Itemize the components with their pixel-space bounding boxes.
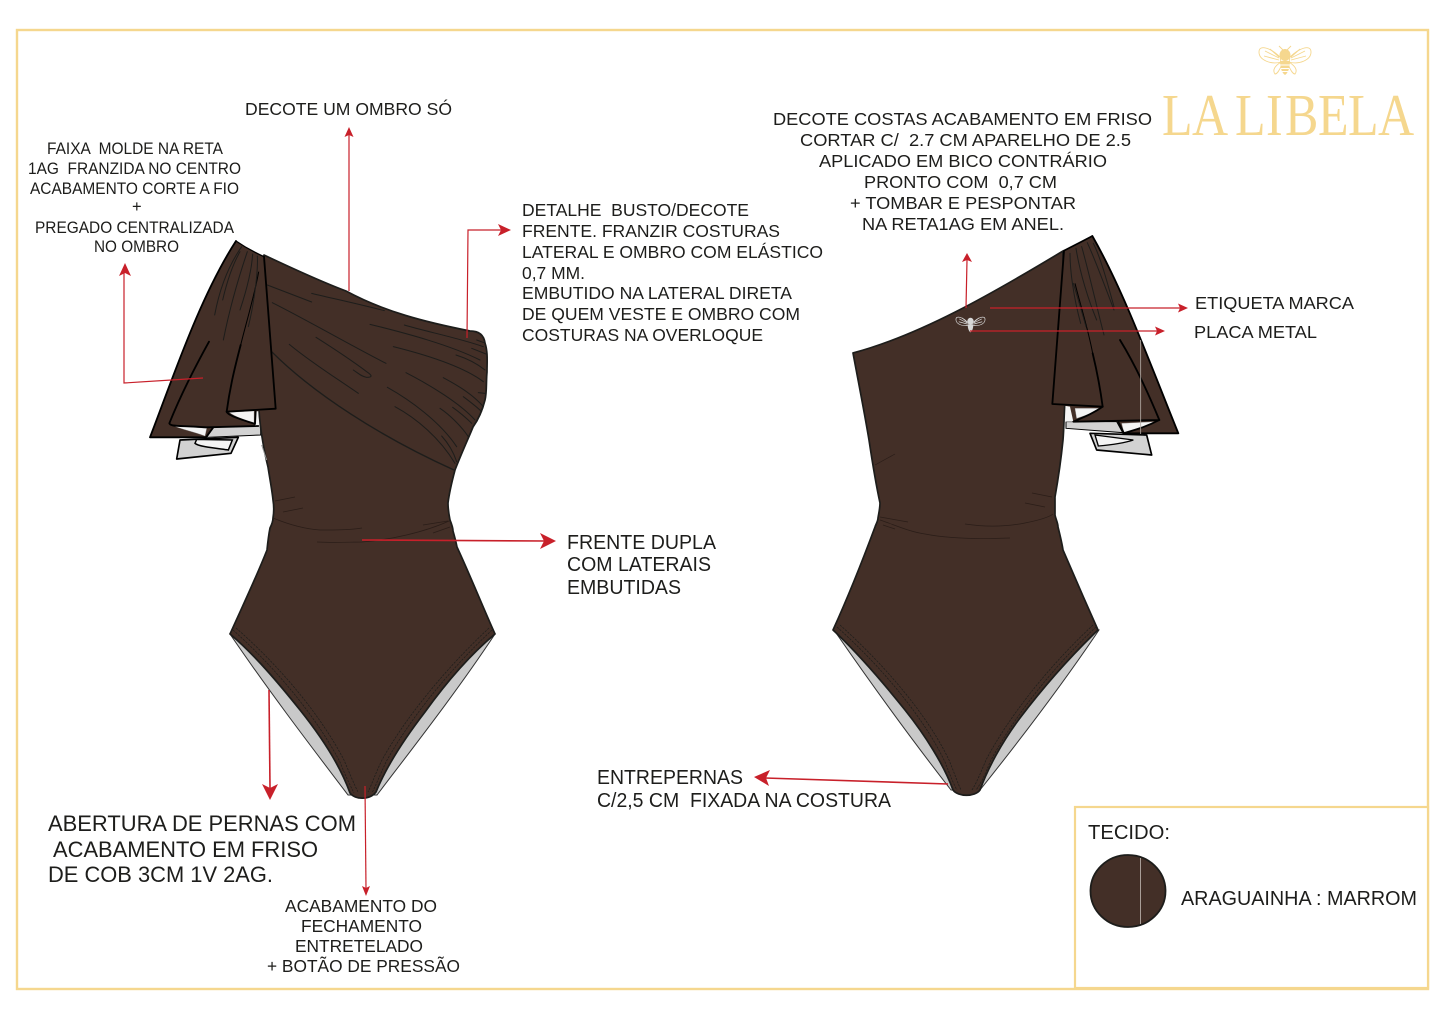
text: detalhe busto/decote: LATERAL E OMBRO COM ELÁSTICO: [522, 242, 823, 262]
text: detalhe busto/decote: DETALHE BUSTO/DECOTE: [522, 200, 749, 220]
heading: tecido: TECIDO:: [1088, 822, 1170, 844]
arrow: abertura de pernas: [262, 690, 278, 800]
text: detalhe busto/decote: EMBUTIDO NA LATERAL DIRETA: [522, 283, 792, 303]
text: decote um ombro: DECOTE UM OMBRO SÓ: [245, 98, 452, 119]
text: acabamento do fechamento: ENTRETELADO: [295, 936, 423, 956]
sleeve gathers: [215, 247, 257, 340]
text: abertura de pernas: [48, 811, 356, 887]
garment: back view: [833, 236, 1178, 795]
right gather edge marks: [472, 340, 486, 393]
text: placa metal: PLACA METAL: [1194, 322, 1317, 342]
arrow: placa metal: [970, 326, 1165, 336]
waist seams: [875, 454, 1053, 539]
text: detalhe busto/decote: COSTURAS NA OVERLOQUE: [522, 325, 763, 345]
arrow: detalhe busto: [467, 224, 511, 338]
logo: Lalibela: [1162, 46, 1415, 148]
body: [833, 251, 1098, 795]
waist seams: [273, 497, 450, 542]
text: faixa molde: +: [132, 198, 142, 216]
sleeve cloth: [150, 241, 276, 437]
sleeve lining pieces: [177, 410, 262, 459]
brand name: LALIBELA: [1162, 82, 1415, 148]
text: frente dupla: EMBUTIDAS: [567, 577, 681, 599]
body seam ticks: [262, 445, 267, 460]
text: faixa molde: PREGADO CENTRALIZADA: [35, 219, 234, 237]
garment: front view: [150, 241, 495, 798]
text: detalhe busto/decote: [522, 200, 823, 345]
icon: metal plate bee: [956, 317, 985, 332]
text: etiqueta marca: ETIQUETA MARCA: [1195, 293, 1354, 313]
text: acabamento do fechamento: [267, 896, 460, 976]
text: frente dupla: FRENTE DUPLA: [567, 532, 717, 554]
arrow: etiqueta marca: [990, 304, 1188, 312]
leg stitching: [233, 630, 354, 793]
text: abertura de pernas: DE COB 3CM 1V 2AG.: [48, 862, 273, 887]
text: abertura de pernas: ACABAMENTO EM FRISO: [53, 837, 318, 862]
text: faixa molde: [28, 140, 241, 256]
arrow: decote costas: [962, 253, 972, 308]
text: entrepernas: [597, 767, 892, 812]
text: faixa molde: NO OMBRO: [94, 238, 179, 256]
seam guide line: [1139, 340, 1142, 434]
wrap seam: [272, 352, 454, 470]
fabric name: ARAGUAINHA : MARROM: [1181, 888, 1417, 910]
arrow: faixa molde: [119, 263, 203, 383]
text: entrepernas: C/2,5 CM FIXADA NA COSTURA: [597, 790, 892, 812]
text: decote costas: + TOMBAR E PESPONTAR: [850, 193, 1076, 213]
leg stitching: [837, 627, 957, 790]
fabric swatch: [1090, 855, 1166, 927]
arrow: decote um ombro: [344, 127, 354, 291]
pleats: [267, 285, 485, 463]
sleeve lining pieces: [1065, 407, 1152, 455]
text: detalhe busto/decote: 0,7 MM.: [522, 263, 585, 283]
text: faixa molde: ACABAMENTO CORTE A FIO: [30, 180, 239, 198]
panel: tecido: [1075, 807, 1428, 988]
leg lining: [834, 630, 1099, 790]
text: decote costas: CORTAR C/ 2.7 CM APARELHO DE 2.5: [800, 130, 1131, 150]
text: decote costas: NA RETA1AG EM ANEL.: [862, 214, 1064, 234]
text: faixa molde: 1AG FRANZIDA NO CENTRO: [28, 160, 241, 178]
arrow: frente dupla: [362, 533, 556, 549]
text: acabamento do fechamento: FECHAMENTO: [301, 916, 422, 936]
leg lining: [230, 634, 495, 795]
text: acabamento do fechamento: + BOTÃO DE PRESSÃO: [267, 955, 460, 976]
white lining glimpses: [173, 426, 207, 436]
text: decote costas: [773, 109, 1152, 234]
icon: bee: [1259, 46, 1311, 75]
body: [230, 255, 495, 798]
text: detalhe busto/decote: FRENTE. FRANZIR COSTURAS: [522, 221, 780, 241]
sleeve outlines: [150, 241, 236, 437]
text: entrepernas: ENTREPERNAS: [597, 767, 743, 789]
text: frente dupla: [567, 532, 717, 599]
text: abertura de pernas: ABERTURA DE PERNAS COM: [48, 811, 356, 836]
sleeve (back): [1052, 236, 1178, 434]
arrow: entrepernas: [754, 770, 948, 786]
text: frente dupla: COM LATERAIS: [567, 554, 711, 576]
arrow: acabamento do fechamento: [362, 786, 370, 896]
text: faixa molde: FAIXA MOLDE NA RETA: [47, 140, 223, 158]
text: detalhe busto/decote: DE QUEM VESTE E OMBRO COM: [522, 304, 800, 324]
text: decote costas: PRONTO COM 0,7 CM: [864, 172, 1057, 192]
text: acabamento do fechamento: ACABAMENTO DO: [285, 896, 437, 916]
text: decote costas: APLICADO EM BICO CONTRÁRIO: [819, 151, 1107, 171]
text: decote costas: DECOTE COSTAS ACABAMENTO EM FRISO: [773, 109, 1152, 129]
bust drape folds and sleeve (front): [150, 241, 486, 470]
